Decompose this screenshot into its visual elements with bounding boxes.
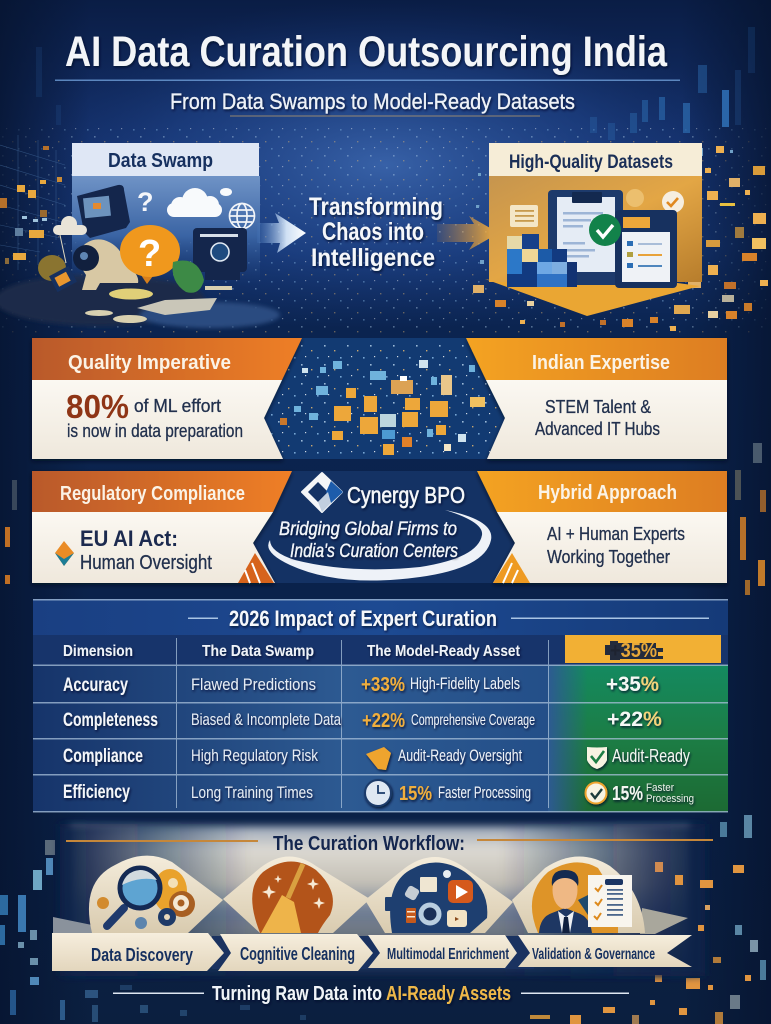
body text: Working Together bbox=[547, 546, 670, 567]
heading bar bbox=[32, 471, 292, 512]
orange disc bbox=[252, 861, 333, 933]
body text: AI + Human Experts bbox=[547, 523, 685, 544]
row: completeness: Completeness bbox=[63, 710, 158, 731]
text block: transforming bbox=[309, 193, 443, 272]
icon: cloud bbox=[167, 188, 232, 217]
icon: sparkles bbox=[262, 875, 325, 909]
header row text: The Data Swamp bbox=[202, 643, 314, 660]
icon: stones bbox=[85, 286, 232, 323]
corner stripes bbox=[493, 553, 530, 583]
gold cell bbox=[565, 635, 721, 663]
row: accuracy: Flawed Predictions bbox=[191, 675, 316, 694]
subtitle rule bbox=[230, 116, 540, 117]
row: completeness: +22% bbox=[362, 710, 405, 732]
arrow: to transformation bbox=[257, 213, 306, 253]
row: efficiency: Processing bbox=[646, 793, 694, 805]
banner: data discovery: Data Discovery bbox=[91, 945, 193, 965]
icon: mushroom rock bbox=[75, 239, 138, 290]
body heading: EU AI Act: bbox=[80, 526, 178, 551]
icon: eu shield bbox=[55, 541, 74, 566]
text block: transforming: Intelligence bbox=[311, 244, 435, 272]
row: compliance: Audit-Ready bbox=[612, 746, 690, 766]
tagline: Bridging Global Firms to bbox=[279, 519, 457, 540]
tray bbox=[485, 279, 700, 316]
heading: Indian Expertise bbox=[532, 352, 670, 374]
banner: validation and governance: Validation & Governance bbox=[532, 946, 655, 963]
step 1: data discovery bbox=[89, 856, 223, 933]
brand name: Cynergy BPO bbox=[347, 482, 465, 508]
panel: indian expertise bbox=[466, 338, 727, 459]
panel: central cynergy block bbox=[253, 471, 515, 583]
heading bar bbox=[477, 471, 727, 512]
row: efficiency: Faster bbox=[646, 782, 674, 794]
panel body bbox=[489, 176, 702, 282]
icon: spot bbox=[168, 878, 178, 888]
row: accuracy bbox=[63, 673, 659, 696]
panel: quality imperative bbox=[32, 338, 302, 459]
row: completeness bbox=[63, 708, 662, 732]
subtitle: From Data Swamps to Model-Ready Datasets bbox=[170, 89, 575, 114]
swoosh bbox=[268, 510, 491, 581]
title rule bbox=[55, 80, 680, 81]
row: completeness: +22% bbox=[607, 708, 662, 731]
icon: tablet bbox=[77, 185, 130, 238]
closing tagline: AI-Ready Assets bbox=[386, 983, 511, 1005]
icon: note bbox=[510, 205, 538, 227]
row: compliance bbox=[63, 746, 690, 770]
hero right squares bbox=[473, 146, 768, 331]
row: efficiency: Efficiency bbox=[63, 782, 130, 803]
card body bbox=[32, 380, 283, 459]
corner stripes bbox=[238, 553, 274, 583]
panel backdrop bbox=[70, 826, 690, 974]
heading: High-Quality Datasets bbox=[509, 152, 673, 173]
icon: magnifier bbox=[107, 868, 160, 926]
icon: person bbox=[539, 870, 592, 933]
panel: data swamp bbox=[0, 143, 280, 328]
closing tagline: Turning Raw Data into bbox=[212, 983, 382, 1005]
banner backing bbox=[212, 936, 534, 969]
heading: The Curation Workflow: bbox=[273, 833, 465, 855]
arrow: to datasets bbox=[437, 216, 499, 250]
heading: Data Swamp bbox=[108, 150, 213, 172]
icon: media set bbox=[385, 870, 473, 927]
row: compliance: Audit-Ready Oversight bbox=[398, 747, 522, 765]
icon: globe bbox=[230, 204, 254, 228]
gold cell value: +35% bbox=[610, 640, 657, 662]
side wings bbox=[53, 908, 688, 934]
right skyline squares bbox=[655, 862, 721, 963]
body text bbox=[547, 523, 685, 567]
icon: flag chip bbox=[49, 266, 77, 292]
panel: hybrid approach bbox=[477, 471, 727, 583]
bottom left bars bbox=[0, 840, 306, 1022]
icon: yellow blob bbox=[38, 255, 66, 281]
step 4: validation and governance bbox=[512, 856, 645, 933]
hero left squares bbox=[0, 146, 62, 264]
tagline bbox=[279, 519, 458, 562]
step 2: cognitive cleaning bbox=[223, 856, 370, 933]
row: accuracy: Accuracy bbox=[63, 675, 128, 696]
step 3: multimodal enrichment bbox=[365, 857, 513, 933]
orange disc bbox=[532, 862, 618, 933]
icon: checklist bbox=[578, 875, 632, 927]
heading rules bbox=[66, 839, 713, 842]
text block: transforming: Chaos into bbox=[322, 218, 424, 246]
heading: Hybrid Approach bbox=[538, 482, 677, 504]
banner: data discovery bbox=[52, 933, 224, 971]
icon: orange question bubble bbox=[120, 225, 180, 284]
left fade bbox=[60, 824, 250, 976]
heading: Regulatory Compliance bbox=[60, 483, 245, 505]
heading bar bbox=[72, 143, 259, 176]
row: compliance: High Regulatory Risk bbox=[191, 746, 318, 765]
row: efficiency: 15% bbox=[612, 783, 643, 805]
row: efficiency bbox=[63, 780, 694, 806]
row: efficiency: 15% bbox=[399, 783, 432, 805]
text block: transforming: Transforming bbox=[309, 193, 443, 221]
green fade bbox=[548, 665, 728, 812]
icon: leaf bbox=[173, 260, 204, 293]
heading: Quality Imperative bbox=[68, 352, 231, 374]
icon: cynergy logo bbox=[302, 473, 343, 512]
panel: workflow bbox=[52, 824, 721, 976]
panel: central data hexagon bbox=[264, 338, 505, 459]
card body bbox=[32, 512, 275, 583]
banner: multimodal enrichment: Multimodal Enrichment bbox=[387, 946, 509, 963]
row: compliance: Compliance bbox=[63, 746, 143, 767]
panel: high-quality datasets bbox=[485, 143, 702, 316]
mid side accents bbox=[5, 443, 766, 595]
table body bbox=[33, 635, 728, 812]
heading bar bbox=[32, 338, 302, 380]
banner: multimodal enrichment bbox=[368, 935, 517, 968]
icon: question mark: ? bbox=[137, 187, 154, 217]
row: completeness: Comprehensive Coverage bbox=[411, 712, 535, 729]
row: efficiency: Faster Processing bbox=[438, 784, 531, 802]
body text: STEM Talent & bbox=[545, 396, 652, 417]
icon: small cloud bbox=[53, 216, 87, 263]
swamp ground bbox=[0, 274, 280, 328]
table heading: 2026 Impact of Expert Curation bbox=[229, 606, 497, 631]
panel: impact table bbox=[33, 599, 728, 812]
card body bbox=[486, 380, 727, 459]
body text: is now in data preparation bbox=[67, 420, 243, 441]
faint skyline bars, top bbox=[36, 27, 755, 140]
icon: green check bbox=[589, 214, 621, 246]
icon: data cubes bbox=[507, 234, 577, 287]
row: accuracy: +33% bbox=[361, 674, 405, 696]
row: accuracy: High-Fidelity Labels bbox=[410, 675, 520, 693]
stat label: of ML effort bbox=[134, 395, 221, 416]
tagline rules bbox=[113, 992, 629, 994]
panel body bbox=[72, 176, 260, 285]
body text bbox=[535, 396, 660, 439]
icon: second document bbox=[615, 210, 677, 288]
icon: dark device bbox=[193, 228, 247, 280]
table lines bbox=[33, 599, 728, 812]
right fade bbox=[500, 824, 705, 976]
row: efficiency: Long Training Times bbox=[191, 783, 313, 802]
banner: cognitive cleaning bbox=[218, 934, 373, 971]
stat: 80%: 80% bbox=[66, 388, 129, 425]
heading bar bbox=[466, 338, 727, 380]
icon: gears bbox=[97, 891, 195, 929]
icon: camera lens bbox=[73, 245, 99, 271]
body text: Advanced IT Hubs bbox=[535, 418, 660, 439]
puzzle badge bbox=[605, 641, 663, 660]
header row text bbox=[63, 643, 521, 660]
header row text: The Model-Ready Asset bbox=[367, 643, 521, 660]
banner: cognitive cleaning: Cognitive Cleaning bbox=[240, 944, 355, 964]
green column bbox=[548, 665, 728, 812]
panel: regulatory compliance bbox=[32, 471, 292, 583]
body text: Human Oversight bbox=[80, 552, 212, 574]
heading rules bbox=[188, 618, 709, 619]
navy disc bbox=[390, 862, 487, 933]
title: AI Data Curation Outsourcing India bbox=[65, 28, 668, 76]
row: completeness: Biased & Incomplete Data bbox=[191, 710, 341, 729]
header row text: Dimension bbox=[63, 643, 133, 660]
icon: check badge bbox=[662, 191, 684, 213]
icon: clipboard bbox=[548, 190, 623, 285]
icon: broom bbox=[261, 864, 303, 933]
heading bar bbox=[489, 143, 702, 176]
icon: orange question bubble: ? bbox=[138, 233, 161, 275]
banner: validation and governance bbox=[518, 935, 692, 967]
orange blob bbox=[153, 869, 187, 913]
card body bbox=[493, 512, 727, 583]
data squares bbox=[280, 375, 485, 455]
tagline: India's Curation Centers bbox=[290, 541, 458, 562]
hero left grid lines bbox=[0, 135, 65, 270]
header row bbox=[33, 635, 728, 665]
row: accuracy: +35% bbox=[606, 673, 659, 696]
bottom right squares bbox=[530, 815, 766, 1024]
icon: gold coin bbox=[626, 189, 644, 207]
title bar bbox=[33, 599, 728, 635]
